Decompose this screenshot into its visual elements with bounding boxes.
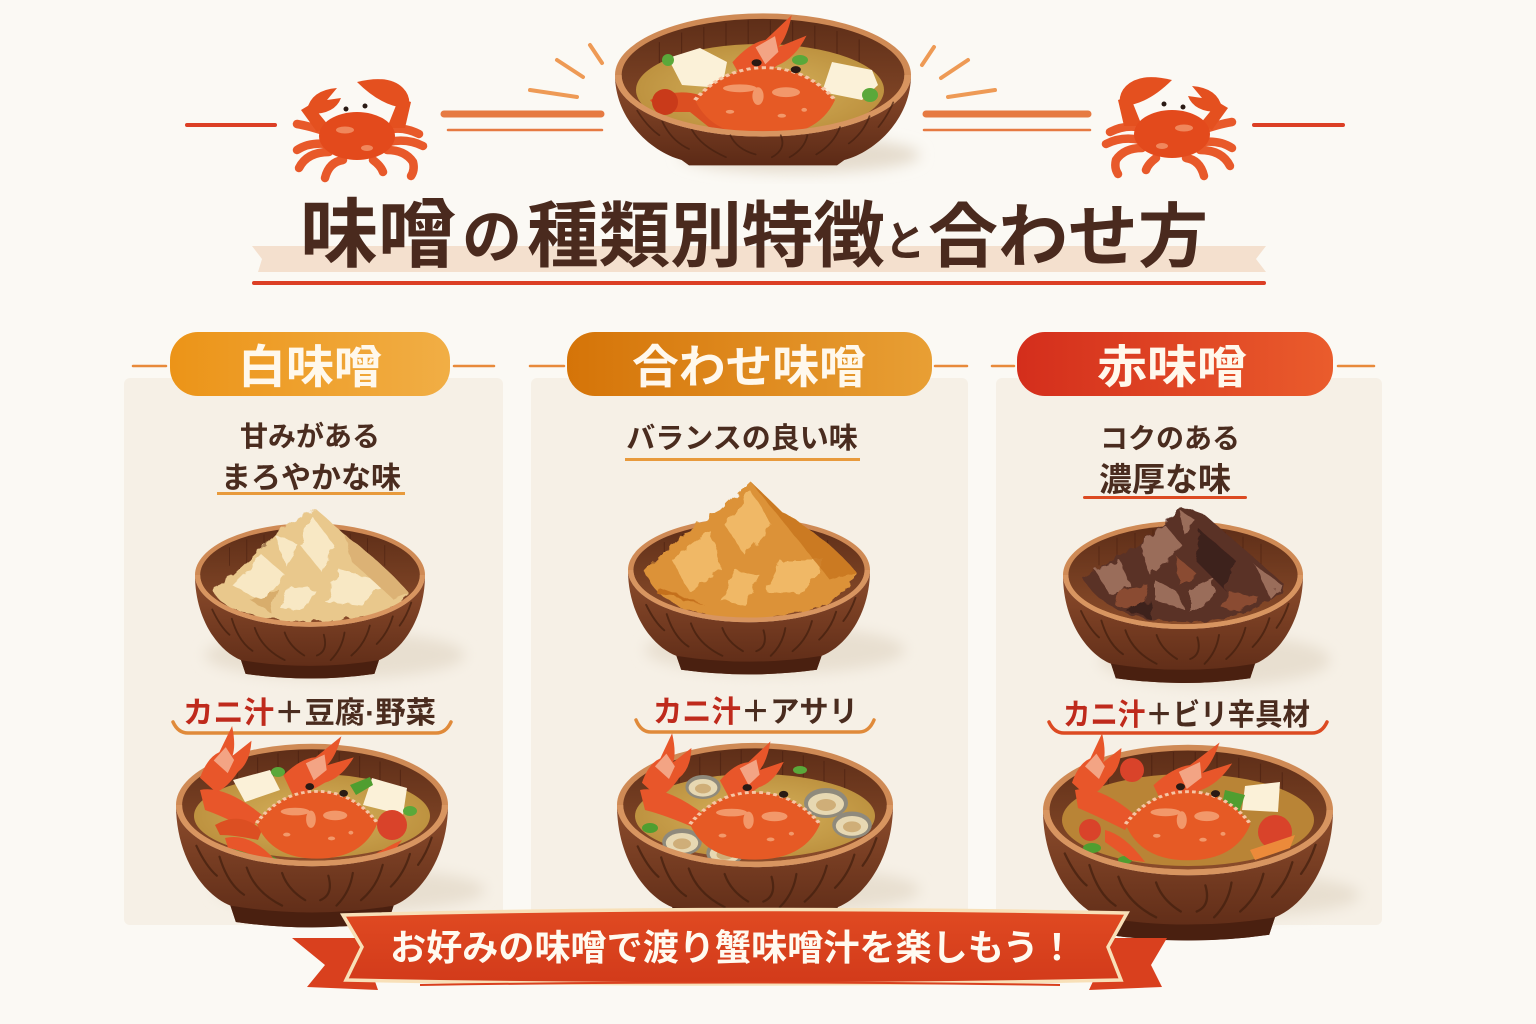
closing banner: お好みの味噌で渡り蟹味噌汁を楽しもう！: [390, 927, 1075, 968]
description: 白味噌: [217, 420, 405, 495]
description: 合わせ味噌: バランスの良い味: [626, 422, 858, 455]
soup bowl: 赤味噌 (spicy ingredients): [1043, 732, 1360, 940]
column header: 合わせ味噌: 合わせ味噌: [632, 341, 866, 393]
description: 赤味噌: [1083, 423, 1247, 499]
soup bowl: 合わせ味噌 (clams): [617, 732, 920, 929]
description: 白味噌: 甘みがある: [240, 420, 380, 452]
icon: left crab: [297, 79, 423, 178]
miso bowl: 赤味噌: [1063, 506, 1330, 686]
panel: 赤味噌: [996, 378, 1382, 925]
title: 味噌: [300, 193, 456, 278]
title: の: [462, 204, 522, 271]
column header: 白味噌: 白味噌: [238, 341, 382, 393]
column header: 赤味噌: [1017, 332, 1333, 396]
title: [300, 193, 1208, 278]
combo label: カニ汁+豆腐・野菜: カニ汁＋豆腐·野菜: [183, 697, 436, 730]
panel: 白味噌: [124, 378, 503, 925]
panel: 合わせ味噌: [531, 378, 968, 925]
title: と: [885, 218, 925, 265]
miso bowl: 合わせ味噌: [628, 481, 905, 674]
miso bowl: 白味噌: [195, 508, 465, 679]
combo label: カニ汁+アサリ: カニ汁＋アサリ: [653, 696, 858, 729]
column header lines: [133, 365, 1374, 367]
title: 種類別特徴: [527, 197, 885, 277]
title: 合わせ方: [928, 198, 1208, 276]
icon: right crab: [1106, 77, 1232, 176]
description: 赤味噌: 濃厚な味: [1099, 461, 1231, 498]
closing banner: [292, 909, 1167, 990]
column header: 合わせ味噌: [567, 332, 932, 396]
hero bowl of crab miso soup: [615, 13, 920, 173]
column header: 白味噌: [170, 332, 450, 396]
combo label: カニ汁+ピリ辛具材: カニ汁＋ビリ辛具材: [1063, 699, 1310, 732]
column header: 赤味噌: 赤味噌: [1097, 341, 1247, 393]
title ribbon: [252, 246, 1266, 272]
description: 赤味噌: コクのある: [1100, 423, 1240, 454]
title underline: [252, 281, 1266, 285]
description: 白味噌: まろやかな味: [221, 462, 401, 495]
soup bowl: 白味噌 (tofu and vegetables): [176, 724, 485, 927]
header decoration lines: [187, 45, 1343, 130]
